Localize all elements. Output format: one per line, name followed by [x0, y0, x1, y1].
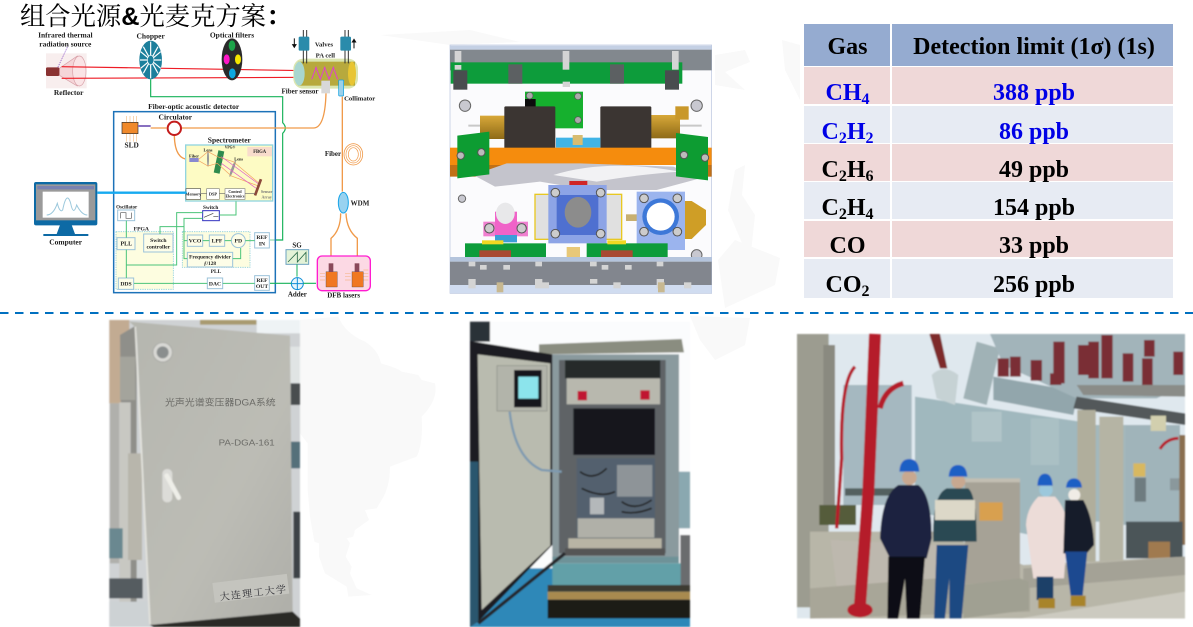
icon: WDM coupler: [338, 192, 370, 213]
radiator: [843, 385, 912, 505]
silver disc: [473, 163, 700, 190]
touch screen: [497, 366, 547, 411]
side green boards: [457, 132, 489, 178]
image: CAD model of photoacoustic module: [450, 45, 712, 293]
row: C2H2: 2: [866, 130, 874, 147]
bottom bracket: [450, 257, 712, 262]
person 2: [933, 465, 977, 618]
icon: fiber coil: Fiber: [325, 150, 341, 158]
row: CH4: [804, 67, 1173, 108]
aluminium frame: [120, 325, 137, 615]
panel: spectrometer: Array: [261, 194, 272, 199]
open door: [470, 341, 552, 627]
table: gas detection limits: [804, 24, 1173, 300]
panel: spectrometer: Memory: [185, 192, 202, 197]
row: CO: 33 ppb: [999, 233, 1069, 259]
row: C2H2: 2: [839, 130, 847, 147]
person 1: [880, 459, 932, 618]
photo: field installation at transformer: [797, 334, 1185, 618]
panel: PLL block: PLL: [211, 269, 222, 275]
side screws: [458, 100, 702, 260]
arrow: green signal routing: [126, 201, 255, 283]
panel: PLL block: [182, 232, 250, 275]
icon: reference in: IN: [259, 241, 266, 247]
icon: oscillator: [116, 205, 138, 221]
icon: reference in: [255, 233, 269, 248]
row: CO2: 2: [862, 283, 870, 300]
panel: FPGA block: FPGA: [134, 227, 150, 233]
row: C2H6: 2: [839, 168, 847, 185]
title: 组合光源&光麦克方案：: [20, 3, 291, 31]
icon: SLD source: [122, 116, 151, 150]
row: CO: CO: [830, 233, 866, 259]
row: C2H4: 154 ppb: [993, 195, 1075, 221]
pink valve: [483, 222, 528, 236]
row: C2H2: [804, 106, 1173, 147]
panel: spectrometer: DSP: [209, 192, 217, 197]
icon: DAC: DAC: [209, 281, 221, 287]
top bracket: [450, 46, 712, 50]
icon: infrared thermal source and reflector: [38, 31, 93, 97]
stainless gas analyser cabinet: [963, 478, 1029, 618]
icon: photoacoustic cell and valves: Collimator: [344, 95, 375, 102]
panel: PLL block: ƒ/128: [204, 261, 216, 267]
row: C2H4: H: [847, 195, 866, 221]
arrow: blue data cable: [97, 189, 187, 196]
transformer tank: [915, 397, 1080, 545]
icon: switch: Switch: [203, 205, 218, 211]
row: C2H4: 4: [866, 206, 874, 223]
panel: fiber-optic acoustic detector: [114, 93, 357, 293]
cabinet labels: PA-DGA-161: [219, 439, 275, 448]
arrow: orange sensing fiber: [151, 93, 357, 260]
icon: signal generator and adder: [270, 242, 316, 299]
divider: dashed line: [0, 312, 1193, 314]
dark equipment at right: [1126, 522, 1183, 558]
icon: DAC: [207, 278, 223, 289]
row: C2H4: [804, 182, 1173, 223]
panel: spectrometer: Control: [228, 189, 242, 194]
panel: PLL block: LPF: [212, 239, 223, 245]
arrow: red infrared beams: [62, 67, 309, 80]
cable: [510, 412, 562, 472]
panel: spectrometer: Sensor: [261, 189, 273, 194]
icon: chopper wheel: Chopper: [137, 32, 165, 41]
icon: photoacoustic cell and valves: Valves: [315, 42, 334, 49]
icon: circulator: [159, 113, 193, 135]
panel: spectrometer: Fiber: [189, 153, 199, 158]
icon: fiber coil: [325, 144, 363, 165]
cabinet logo: [153, 343, 172, 362]
right blue block: [626, 214, 639, 221]
icon: infrared thermal source and reflector: Infrared thermal: [38, 31, 93, 40]
row: CO2: [804, 259, 1173, 300]
icon: reference in: REF: [256, 235, 268, 241]
row: C2H6: H: [847, 157, 866, 183]
row: CH4: CH: [826, 80, 862, 106]
crossbeam and columns: [1073, 397, 1185, 425]
cabinet labels: 光声光谱变压器DGA系统: [165, 397, 276, 408]
door handle: [162, 469, 172, 502]
panel: spectrometer: Lens: [204, 148, 213, 153]
panel: PLL block: Frequency divider: [189, 254, 232, 260]
panel: spectrometer: Spectrometer: [208, 136, 252, 145]
red fire pipes: [860, 334, 875, 605]
icon: optical filter wheel: [210, 30, 254, 80]
icon: circulator: Circulator: [159, 113, 193, 122]
panel: system schematic diagram: [34, 30, 375, 300]
icon: photoacoustic cell and valves: [282, 30, 375, 102]
row: C2H2: H: [847, 119, 866, 145]
wooden base: [548, 585, 690, 592]
centre blue cell: [535, 194, 622, 239]
background world map watermark: [300, 30, 800, 597]
icon: computer: Computer: [49, 237, 83, 246]
icon: switch: [203, 205, 219, 221]
row: CO: [804, 221, 1173, 259]
row: CO2: 256 ppb: [993, 272, 1075, 298]
blue connector: [556, 138, 600, 148]
icon: WDM coupler: WDM: [351, 199, 370, 207]
panel: FPGA block: controller: [146, 244, 171, 250]
icon: photoacoustic cell and valves: PA cell: [316, 53, 335, 60]
ground: [810, 532, 1185, 618]
table header: [804, 24, 1173, 66]
table header: Gas: [827, 34, 868, 60]
gold resistors: [480, 116, 510, 139]
row: C2H2: 86 ppb: [999, 119, 1069, 145]
panel: FPGA block: PLL: [121, 242, 132, 248]
icon: signal generator and adder: SG: [292, 242, 302, 250]
panel: fiber-optic acoustic detector: Fiber-optic acoustic detector: [148, 102, 240, 111]
icon: computer: [34, 182, 97, 246]
panel: PLL block: VCO: [189, 239, 202, 245]
row: CH4: 388 ppb: [993, 80, 1075, 106]
panel: spectrometer: VPG®: [225, 145, 235, 150]
green board: [525, 92, 583, 128]
icon: DFB lasers: [317, 256, 370, 300]
icon: optical filter wheel: Optical filters: [210, 30, 254, 39]
arrow: green reference signal from chopper: [151, 79, 285, 240]
table header: Detection limit (1σ) (1s): [913, 34, 1155, 60]
row: C2H6: C: [821, 157, 839, 183]
row: C2H6: 6: [866, 168, 874, 185]
icon: chopper wheel: [137, 32, 165, 79]
row: C2H4: C: [821, 195, 839, 221]
person 4: [1063, 478, 1094, 606]
cabinet body: [539, 339, 684, 354]
icon: infrared thermal source and reflector: Reflector: [54, 88, 84, 97]
panel: PLL block: PD: [235, 239, 242, 245]
icon: reference out: REF: [256, 278, 268, 284]
icon: SLD source: SLD: [125, 141, 139, 150]
icon: infrared thermal source and reflector: radiation source: [39, 40, 92, 49]
panel: spectrometer: FBGA: [253, 150, 267, 155]
lower boards: [465, 243, 546, 258]
row: C2H6: [804, 144, 1173, 185]
cabinet labels: 大连理工大学: [219, 581, 287, 603]
icon: DFB lasers: DFB lasers: [327, 292, 360, 300]
row: C2H4: 2: [839, 206, 847, 223]
orange bar: [450, 148, 712, 165]
row: CO2: CO: [826, 272, 862, 298]
row: CH4: 4: [862, 91, 870, 108]
cabinet labels: [165, 397, 289, 603]
photo: open instrument cabinet: [470, 322, 690, 627]
panel: FPGA block: [116, 227, 173, 289]
icon: oscillator: Oscillator: [116, 205, 138, 210]
icon: reference out: [255, 276, 269, 290]
photo: closed DGA cabinet: [109, 320, 300, 627]
black transformers: [504, 106, 555, 150]
panel: FPGA block: Switch: [150, 238, 167, 244]
panel: FPGA block: DDS: [120, 281, 132, 287]
panel: spectrometer: Electronics: [226, 194, 245, 199]
panel: spectrometer: Lens: [234, 157, 243, 162]
row: C2H6: 49 ppb: [999, 157, 1069, 183]
icon: signal generator and adder: Adder: [288, 291, 307, 299]
icon: photoacoustic cell and valves: Fiber sensor: [282, 87, 318, 95]
person 3: [1026, 474, 1067, 608]
panel: spectrometer: [185, 136, 273, 201]
icon: reference out: OUT: [256, 284, 268, 290]
row: C2H2: C: [821, 119, 839, 145]
cabinet door: [129, 322, 293, 625]
